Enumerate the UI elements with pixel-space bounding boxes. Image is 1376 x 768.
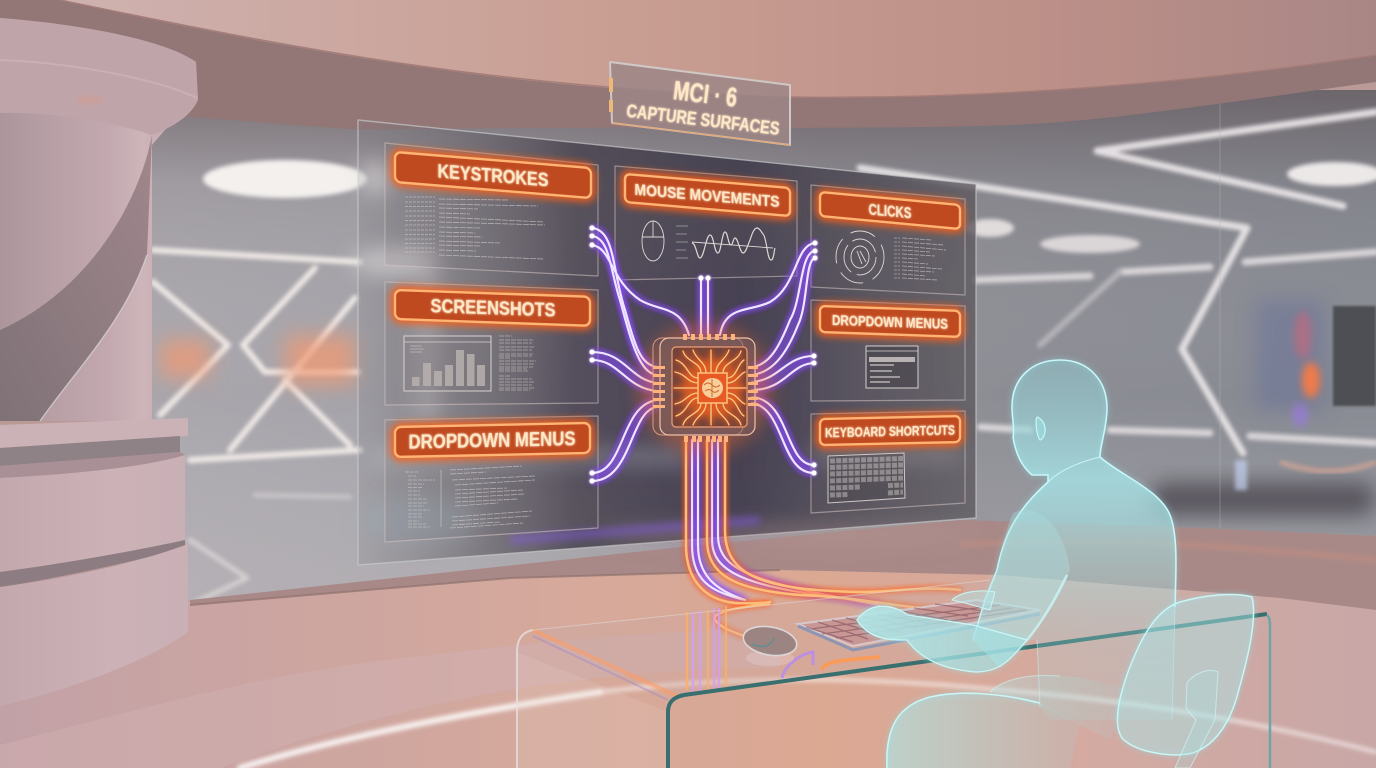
floor light arc: [240, 680, 1376, 768]
heading: keystrokes: [395, 152, 591, 198]
heading: keystrokes: KEYSTROKES: [437, 161, 548, 192]
chip circuit traces: [674, 350, 746, 425]
dropdown left circuit: [592, 400, 657, 481]
panel: dropdown menus right: [811, 300, 965, 401]
keystroke log text lines: [405, 197, 435, 252]
distant dark equipment on right: [1150, 85, 1376, 535]
ceiling: [0, 0, 1376, 130]
title line two: CAPTURE SURFACES: [625, 101, 781, 139]
glass wall: [150, 90, 1376, 600]
heading: dropdown menus: DROPDOWN MENUS: [409, 428, 576, 454]
near forearm and hand: [857, 606, 1027, 672]
holographic person at desk: [857, 360, 1254, 768]
keyboard circuit: [752, 397, 814, 473]
heading: keyboard shortcuts: KEYBOARD SHORTCUTS: [825, 422, 955, 440]
keystroke circuit: [592, 228, 689, 375]
heading: screenshots: [395, 290, 590, 326]
inner arm highlight: [1027, 575, 1067, 640]
heading: mouse movements: MOUSE MOVEMENTS: [635, 181, 780, 211]
heading: dropdown menus right: [820, 306, 960, 337]
heading: keyboard shortcuts: [820, 416, 960, 445]
dropdown menu list and description lines: [405, 466, 535, 528]
panel: keyboard shortcuts: [811, 411, 965, 513]
panel connection dots: [590, 226, 818, 484]
desk edges: [517, 630, 533, 768]
heading: clicks: CLICKS: [868, 201, 912, 223]
ear: [1036, 417, 1045, 440]
icon: click ripple rings: [836, 231, 884, 283]
title line one: MCI · 6: [672, 75, 739, 113]
main glass display panel: [350, 120, 980, 565]
icon: dropdown window: [866, 346, 918, 388]
collar: [1048, 457, 1100, 482]
far hand: [952, 591, 995, 610]
orange reflections on the glass: [160, 335, 355, 385]
left structural column: [0, 18, 198, 706]
dropdown right circuit: [752, 356, 814, 390]
panel: dropdown menus left: [385, 416, 598, 542]
purple fiber circuits from panels to chip: [592, 228, 880, 605]
orange data cables to keyboard: [686, 440, 960, 640]
heading: dropdown menus right: DROPDOWN MENUS: [832, 312, 948, 333]
keyboard on desk: [798, 600, 1040, 650]
screenshot circuit: [592, 352, 657, 391]
lower purple cables: [692, 440, 880, 605]
light reflections in the glass: [350, 160, 980, 545]
mouse circuit: [701, 278, 708, 335]
chair post: [1175, 670, 1218, 768]
floor: [0, 570, 1376, 768]
panel: keystrokes: [385, 143, 598, 276]
heading: clicks: [820, 192, 960, 229]
panel: mouse movements: [615, 166, 797, 280]
heading: dropdown menus: [395, 423, 590, 457]
chart: movement waveform: [692, 228, 775, 260]
screenshot caption text lines: [499, 336, 536, 390]
desk reflections of the cables: [687, 606, 880, 692]
person legs: [887, 676, 1130, 768]
chart: screenshot bar chart: [404, 336, 491, 391]
mouse data lines: [676, 226, 688, 258]
click log text lines: [894, 238, 900, 278]
chair: [1117, 595, 1254, 755]
clicks circuit: [720, 243, 815, 375]
chip pins: [653, 334, 758, 442]
ceiling lights and neon lines behind the glass: [153, 112, 1376, 605]
icon: AI brain core: [698, 373, 727, 403]
central AI chip: [639, 324, 771, 452]
icon: computer mouse on desk: [741, 623, 799, 666]
icon: keyboard: [828, 453, 905, 503]
person torso and head: [973, 360, 1176, 720]
heading: mouse movements: [625, 174, 790, 216]
glass desk: [517, 580, 1270, 768]
mauve base strip under the wall: [190, 520, 1376, 610]
floor inner band: [0, 628, 780, 768]
upper arm: [973, 510, 1070, 668]
title plate: MCI · 6 capture surfaces: [610, 62, 790, 145]
chip inner die: [672, 347, 747, 427]
heading: screenshots: SCREENSHOTS: [430, 296, 556, 322]
panel: screenshots: [385, 282, 598, 405]
icon: mouse outline: [642, 221, 664, 261]
panel: clicks: [811, 185, 965, 295]
